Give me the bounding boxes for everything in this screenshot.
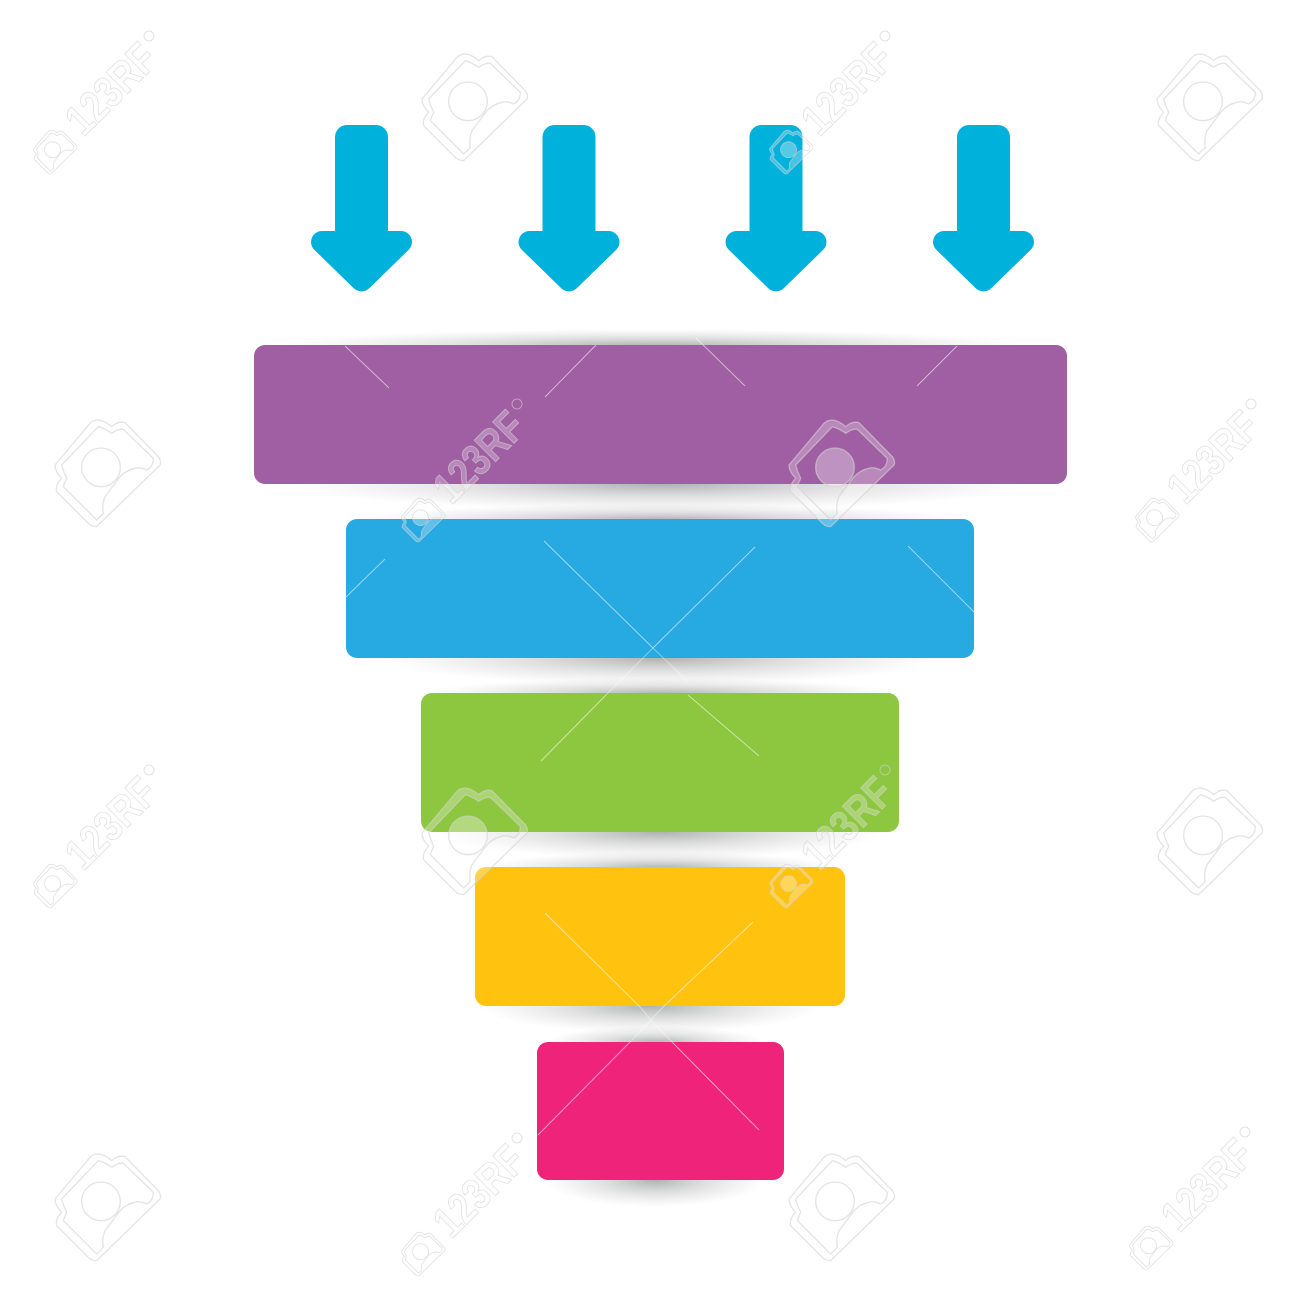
watermark: row 2 egg	[55, 420, 161, 527]
hairline diagonal artefacts across the bars	[345, 338, 974, 1135]
funnel layer 1: purple	[254, 329, 1067, 511]
funnel layer 2: blue	[346, 504, 974, 685]
watermark: row 2 egg	[789, 420, 895, 527]
watermark: row 3 logo	[770, 765, 903, 908]
watermark: row 3 logo	[34, 765, 167, 908]
watermark: row 1 logo	[770, 31, 903, 174]
watermark: row 2 logo: 123RF	[1158, 402, 1269, 513]
watermark: row 3 egg	[422, 788, 528, 895]
funnel layer 4: yellow	[475, 852, 845, 1033]
funnel layer 5: pink	[537, 1026, 784, 1207]
watermark: row 3 logo: 123RF	[792, 768, 903, 879]
four downward arrows	[311, 125, 1034, 291]
arrow 1	[311, 125, 412, 291]
watermark: row 4 egg	[789, 1154, 895, 1261]
watermark: row 3 logo: 123RF	[56, 768, 167, 879]
watermark: row 1 egg	[1157, 54, 1263, 161]
watermark: row 2 logo	[1136, 399, 1269, 542]
arrow 4	[933, 125, 1034, 291]
arrow 3	[726, 125, 826, 291]
arrow 2	[519, 125, 619, 291]
watermark: row 1 egg	[422, 54, 528, 161]
watermark: row 2 logo	[402, 399, 535, 542]
watermark: row 4 logo: 123RF	[424, 1136, 535, 1247]
watermark: row 4 logo: 123RF	[1152, 1130, 1263, 1241]
watermark: row 2 logo: 123RF	[424, 402, 535, 513]
watermark: row 1 logo: 123RF	[56, 34, 167, 145]
watermark: row 1 logo: 123RF	[792, 34, 903, 145]
watermark: row 4 egg	[55, 1154, 161, 1261]
funnel layer 3: green	[421, 678, 899, 859]
watermark: row 4 logo	[402, 1133, 535, 1276]
watermark: row 4 logo	[1130, 1127, 1263, 1270]
watermark: row 3 egg	[1157, 788, 1263, 895]
watermark: row 1 logo	[34, 31, 167, 174]
